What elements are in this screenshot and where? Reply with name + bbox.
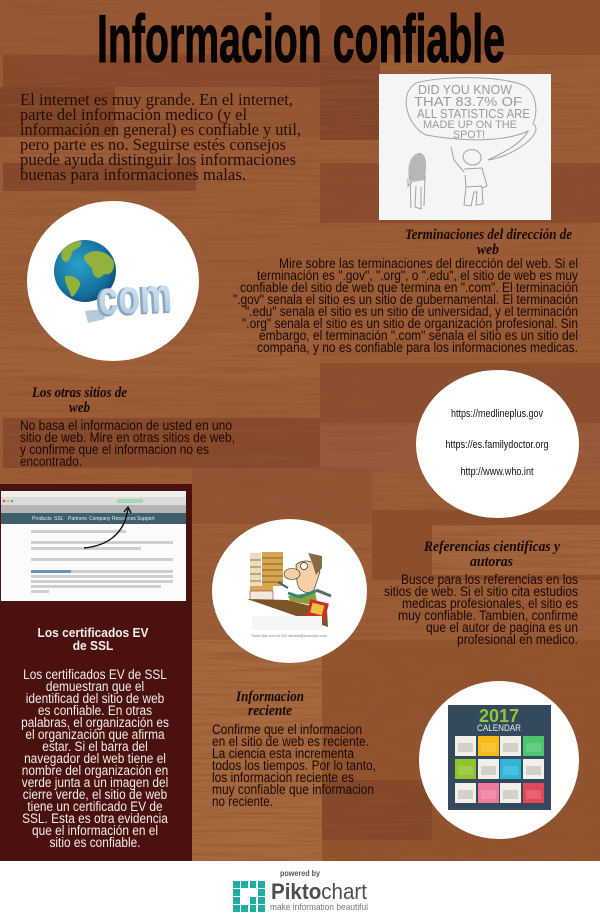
intro text: información en general) es confiable y util, xyxy=(20,120,301,139)
icon: .com lettering: com xyxy=(95,270,172,327)
terminaciones heading xyxy=(405,227,572,258)
comic image: MADE UP ON THE xyxy=(423,119,517,131)
browser screenshot: Company xyxy=(89,516,111,522)
panel: EV SSL certificates xyxy=(0,484,192,861)
globe circle xyxy=(27,201,199,361)
terminaciones heading: web xyxy=(477,242,499,258)
informacion reciente heading xyxy=(235,689,304,719)
browser screenshot: Resources xyxy=(112,516,136,522)
otros sitios heading xyxy=(31,385,127,416)
panel text: demuestran que el xyxy=(46,678,144,694)
footer: Piktochart xyxy=(0,861,600,921)
panel text xyxy=(21,666,169,850)
otros sitios heading: Los otras sitios de xyxy=(31,385,127,401)
informacion reciente text: los informacion reciente es xyxy=(212,770,354,785)
icon: man with books xyxy=(247,552,331,627)
informacion reciente text xyxy=(212,722,376,809)
intro text: parte del información medico (y el xyxy=(20,105,247,124)
otros sitios text: sitio de web. Mire en otras sitios de web, xyxy=(20,430,235,445)
informacion reciente text: no reciente. xyxy=(212,794,273,809)
cartoon circle xyxy=(212,519,367,663)
referencias text: profesional en medico. xyxy=(457,632,578,647)
icon: globe xyxy=(54,240,116,302)
intro text: El internet es muy grande. En el internet, xyxy=(20,90,293,109)
icon: 2017 calendar: CALENDAR xyxy=(477,723,521,733)
referencias text: Busce para los referencias en los xyxy=(401,572,578,587)
panel heading: Los certificados EV xyxy=(38,626,149,640)
informacion reciente text: La ciencia esta incrementa xyxy=(212,746,354,761)
icon: 2017 calendar xyxy=(448,705,551,810)
panel text: Los certificados EV de SSL xyxy=(23,666,167,682)
panel text: sitio es confiable. xyxy=(49,834,141,850)
links circle: http://www.who.int xyxy=(460,466,534,478)
referencias text xyxy=(384,572,578,647)
comic image: DID YOU KNOW xyxy=(418,82,513,97)
referencias heading xyxy=(423,539,560,570)
otros sitios text xyxy=(20,418,235,469)
otros sitios text: No basa el informacion de usted en uno xyxy=(20,418,232,433)
footer: Piktochart: make information beautiful xyxy=(270,902,368,912)
footer: Piktochart: powered by xyxy=(280,868,320,878)
referencias text: medicas profesionales, el sitio es xyxy=(402,596,578,611)
panel text: estar. Si el barra del xyxy=(42,738,148,754)
links circle xyxy=(416,370,579,518)
comic image xyxy=(379,74,551,220)
comic image: SPOT! xyxy=(453,129,485,141)
icon: .com lettering: com xyxy=(97,269,173,326)
referencias text: sitios de web. Si el sitio cita estudios xyxy=(384,584,578,599)
footer: Piktochart: Piktochart xyxy=(271,879,367,904)
panel text: es confiable. En otras xyxy=(38,702,152,718)
informacion reciente heading: reciente xyxy=(248,703,292,719)
panel text: SSL. Esta es otra evidencia xyxy=(22,810,169,826)
intro text: buenas para informaciones malas. xyxy=(20,165,246,184)
links circle: https://es.familydoctor.org xyxy=(446,439,548,451)
panel text: nombre del organización en xyxy=(22,762,168,778)
browser screenshot: Support xyxy=(137,516,155,522)
intro text xyxy=(20,90,301,184)
terminaciones text xyxy=(233,256,578,355)
comic image: ALL STATISTICS ARE xyxy=(417,106,530,121)
otros sitios text: y confirme que el informacion no es xyxy=(20,442,209,457)
panel text: palabras, el organización es xyxy=(21,714,169,730)
panel heading: de SSL xyxy=(73,639,114,653)
otros sitios heading: web xyxy=(69,400,90,416)
comic image: THAT 83.7% OF xyxy=(414,94,522,109)
panel text: el organización que afirma xyxy=(25,726,165,742)
browser screenshot xyxy=(1,491,186,601)
cartoon circle: ToonClips.com #1234 service@toonclips.com xyxy=(251,634,327,638)
calendar circle xyxy=(419,681,579,839)
referencias text: que el autor de pagina es un xyxy=(426,620,578,635)
icon: 2017 calendar: 2017 xyxy=(479,706,519,726)
panel text: identificad del sitio de web xyxy=(26,690,164,706)
panel text: verde junta a un imagen del xyxy=(22,774,168,790)
informacion reciente text: muy confiable que informacion xyxy=(212,782,374,797)
otros sitios text: encontrado. xyxy=(20,454,82,469)
panel text: cierre verde, el sitio de web xyxy=(23,786,167,802)
referencias heading: autoras xyxy=(470,554,513,570)
intro text: pero parte es no. Seguirse estés consejos xyxy=(20,135,286,154)
intro text: puede ayuda distinguir los informaciones xyxy=(20,150,296,169)
panel text: tiene un certificado EV de xyxy=(27,798,163,814)
browser screenshot: SSL xyxy=(54,516,64,522)
panel heading xyxy=(38,626,149,653)
browser screenshot: Products xyxy=(32,516,52,522)
panel text: que el información en el xyxy=(32,822,158,838)
informacion reciente text: todos los tiempos. Por lo tanto, xyxy=(212,758,376,773)
informacion reciente text: en el sitio de web es reciente. xyxy=(212,734,369,749)
icon: Piktochart logo xyxy=(233,881,265,912)
referencias text: muy confiable. Tambien, confirme xyxy=(398,608,578,623)
terminaciones heading: Terminaciones del dirección de xyxy=(405,227,572,243)
panel text: navegador del web tiene el xyxy=(24,750,166,766)
informacion reciente text: Confirme que el informacion xyxy=(212,722,362,737)
referencias heading: Referencias cientificas y xyxy=(423,539,560,555)
informacion reciente heading: Informacion xyxy=(235,689,304,705)
browser screenshot: Partners xyxy=(68,516,87,522)
links circle: https://medlineplus.gov xyxy=(451,408,543,420)
